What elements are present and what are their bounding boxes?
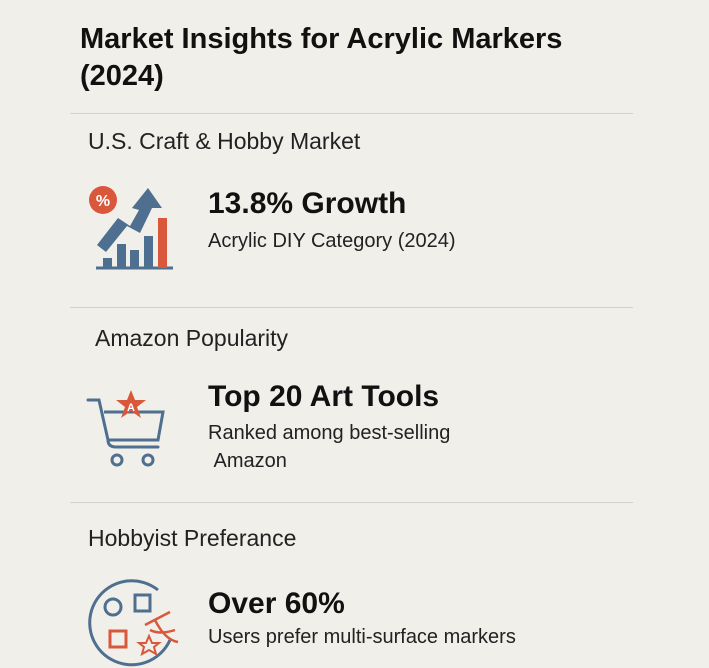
text: ranked [208, 422, 450, 472]
stat: over 60: Over 60% [208, 587, 345, 620]
stat: growth: 13.8% Growth [208, 187, 406, 220]
icon: multi-surface [88, 579, 178, 666]
title [80, 23, 562, 92]
icon: growth chart [89, 186, 173, 270]
icon: growth chart: % [96, 193, 110, 210]
text: acrylic DIY: Acrylic DIY Category (2024) [208, 230, 456, 252]
text: ranked: Amazon [214, 450, 287, 472]
heading: Amazon: Amazon Popularity [95, 325, 288, 351]
text: ranked: Ranked among best-selling [208, 422, 450, 444]
heading: U.S. craft market: U.S. Craft & Hobby Market [88, 128, 360, 154]
icon: cart: A [127, 402, 135, 414]
stat: top 20: Top 20 Art Tools [208, 380, 439, 413]
text: users prefer: Users prefer multi-surface markers [208, 626, 516, 648]
icon: cart [86, 390, 165, 466]
title: Market Insights for Acrylic Markers [80, 23, 562, 55]
heading: hobbyist: Hobbyist Preferance [88, 525, 296, 551]
title: (2024) [80, 60, 164, 92]
